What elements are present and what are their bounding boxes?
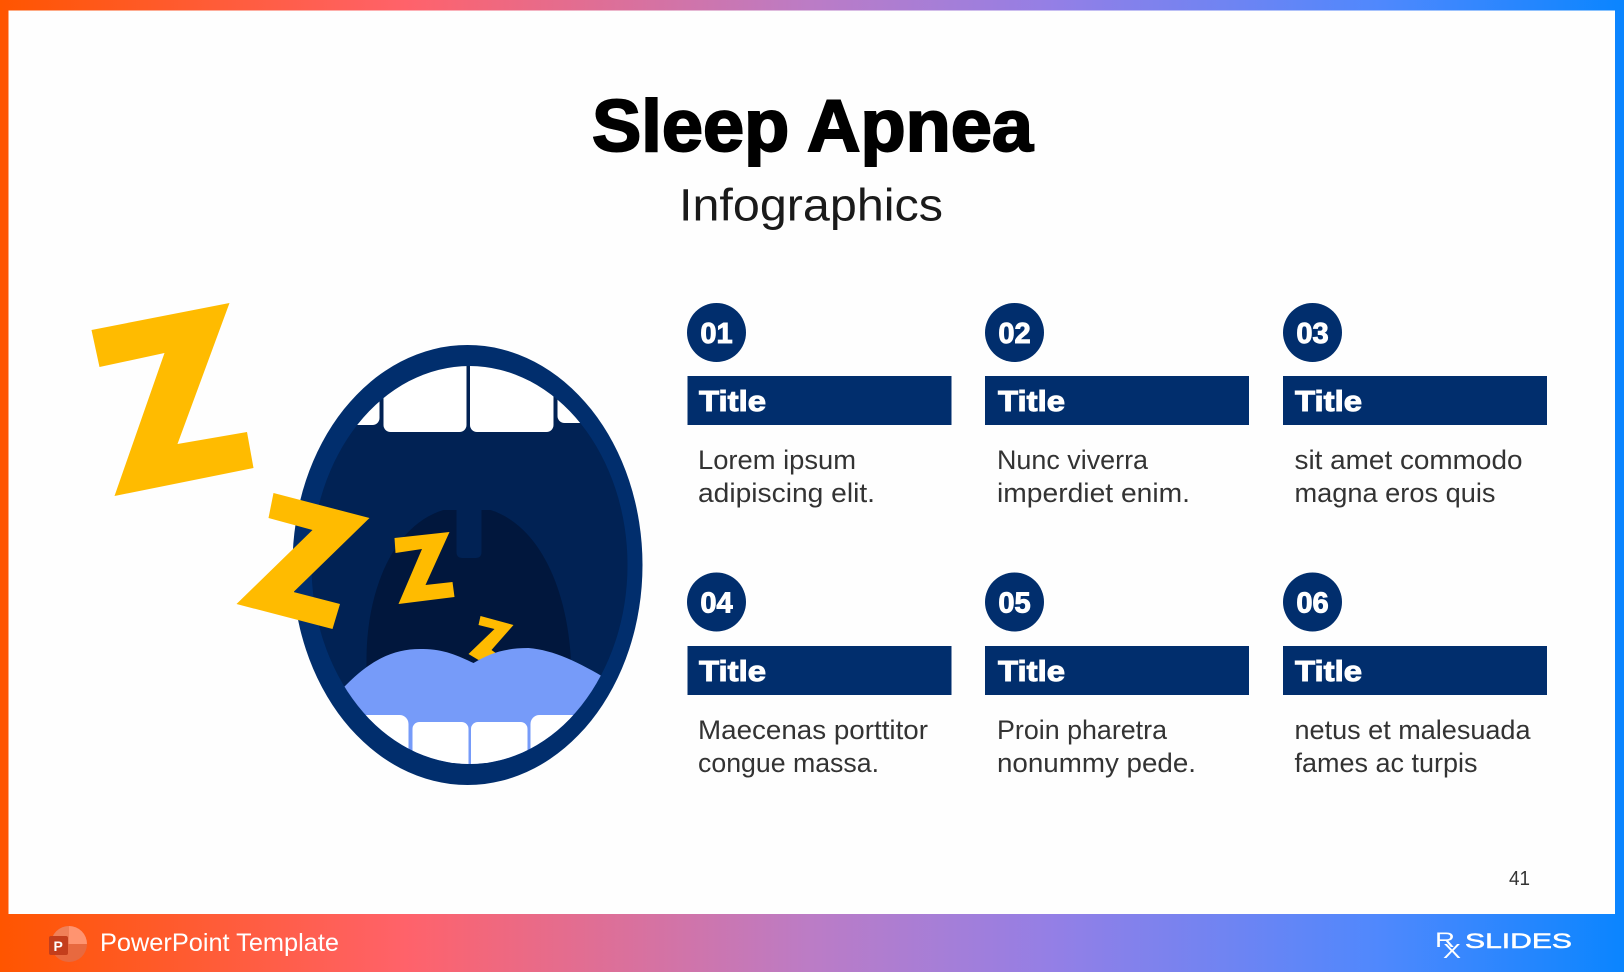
item 04: congue massa. bbox=[698, 748, 879, 778]
mouth interior bbox=[312, 366, 628, 764]
item 01: Title bbox=[699, 386, 766, 418]
throat bbox=[366, 510, 571, 667]
item 03: magna eros quis bbox=[1294, 478, 1496, 508]
upper teeth bbox=[357, 366, 580, 432]
footer label: PowerPoint Template bbox=[100, 929, 339, 957]
item 04: Title bbox=[699, 656, 766, 688]
item 01 bbox=[687, 303, 952, 508]
item 06 bbox=[1283, 572, 1547, 778]
RxSlides logo: SLIDES bbox=[1465, 930, 1572, 953]
icon: medium Z bbox=[236, 493, 370, 629]
page number: 41 bbox=[1509, 868, 1530, 890]
item 06: Title bbox=[1295, 656, 1362, 688]
item 05: nonummy pede. bbox=[997, 748, 1196, 778]
title: Sleep Apnea bbox=[592, 86, 1034, 167]
icon: small Z bbox=[394, 532, 454, 604]
item 03: sit amet commodo bbox=[1294, 445, 1522, 475]
item 02: Nunc viverra bbox=[997, 445, 1148, 475]
item 03: Title bbox=[1295, 386, 1362, 418]
item 01: 01 bbox=[700, 318, 733, 350]
illustration: open mouth with Z letters bbox=[92, 303, 642, 785]
icon: tiny Z bbox=[468, 616, 514, 660]
item 01: adipiscing elit. bbox=[698, 478, 875, 508]
lower teeth bbox=[366, 715, 574, 764]
item 05: Title bbox=[998, 656, 1065, 688]
item 05: 05 bbox=[998, 588, 1031, 620]
item 02: Title bbox=[998, 386, 1065, 418]
mouth details bbox=[344, 366, 601, 764]
uvula bbox=[456, 505, 482, 558]
subtitle: Infographics bbox=[679, 180, 943, 230]
item 05: Proin pharetra bbox=[997, 715, 1167, 745]
icon: PowerPoint logo: P bbox=[54, 938, 63, 954]
icon: large Z bbox=[92, 303, 254, 496]
item 05 bbox=[985, 572, 1249, 778]
item 06: fames ac turpis bbox=[1294, 748, 1478, 778]
item 02: 02 bbox=[998, 318, 1031, 350]
item 06: 06 bbox=[1296, 588, 1329, 620]
item 02 bbox=[985, 303, 1249, 508]
item 04 bbox=[687, 572, 952, 778]
RxSlides logo bbox=[1435, 929, 1572, 963]
item 02: imperdiet enim. bbox=[997, 478, 1190, 508]
item 03 bbox=[1283, 303, 1547, 508]
icon: PowerPoint logo bbox=[49, 926, 87, 962]
mouth outer ring bbox=[292, 345, 642, 785]
item 03: 03 bbox=[1296, 318, 1329, 350]
item 04: Maecenas porttitor bbox=[698, 715, 928, 745]
item 04: 04 bbox=[700, 588, 733, 620]
tongue bbox=[344, 648, 601, 764]
RxSlides logo: R bbox=[1435, 929, 1455, 952]
item 01: Lorem ipsum bbox=[698, 445, 856, 475]
item 06: netus et malesuada bbox=[1294, 715, 1531, 745]
RxSlides logo: X bbox=[1443, 941, 1461, 963]
